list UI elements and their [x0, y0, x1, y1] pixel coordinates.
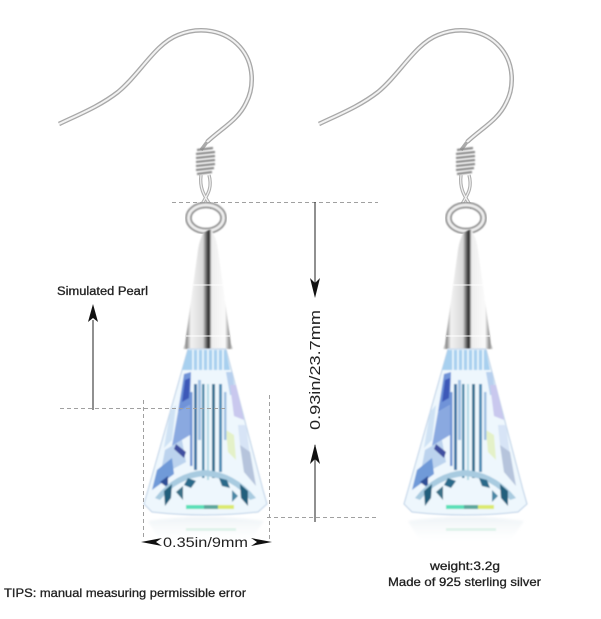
height label: 0.93in/23.7mm: [307, 310, 324, 430]
right earring: [319, 30, 527, 547]
dashed guide lines: [60, 202, 378, 540]
pearl label: Simulated Pearl: [57, 286, 148, 298]
pearl dimension arrow: [88, 304, 98, 410]
weight note: weight:3.2g: [429, 559, 500, 573]
width dimension arrows: [141, 538, 272, 546]
left earring: [59, 30, 267, 547]
width label: 0.35in/9mm: [163, 534, 248, 550]
tips note: TIPS: manual measuring permissible error: [4, 586, 246, 600]
height dimension arrow: [310, 202, 320, 522]
material note: Made of 925 sterling silver: [388, 575, 541, 589]
